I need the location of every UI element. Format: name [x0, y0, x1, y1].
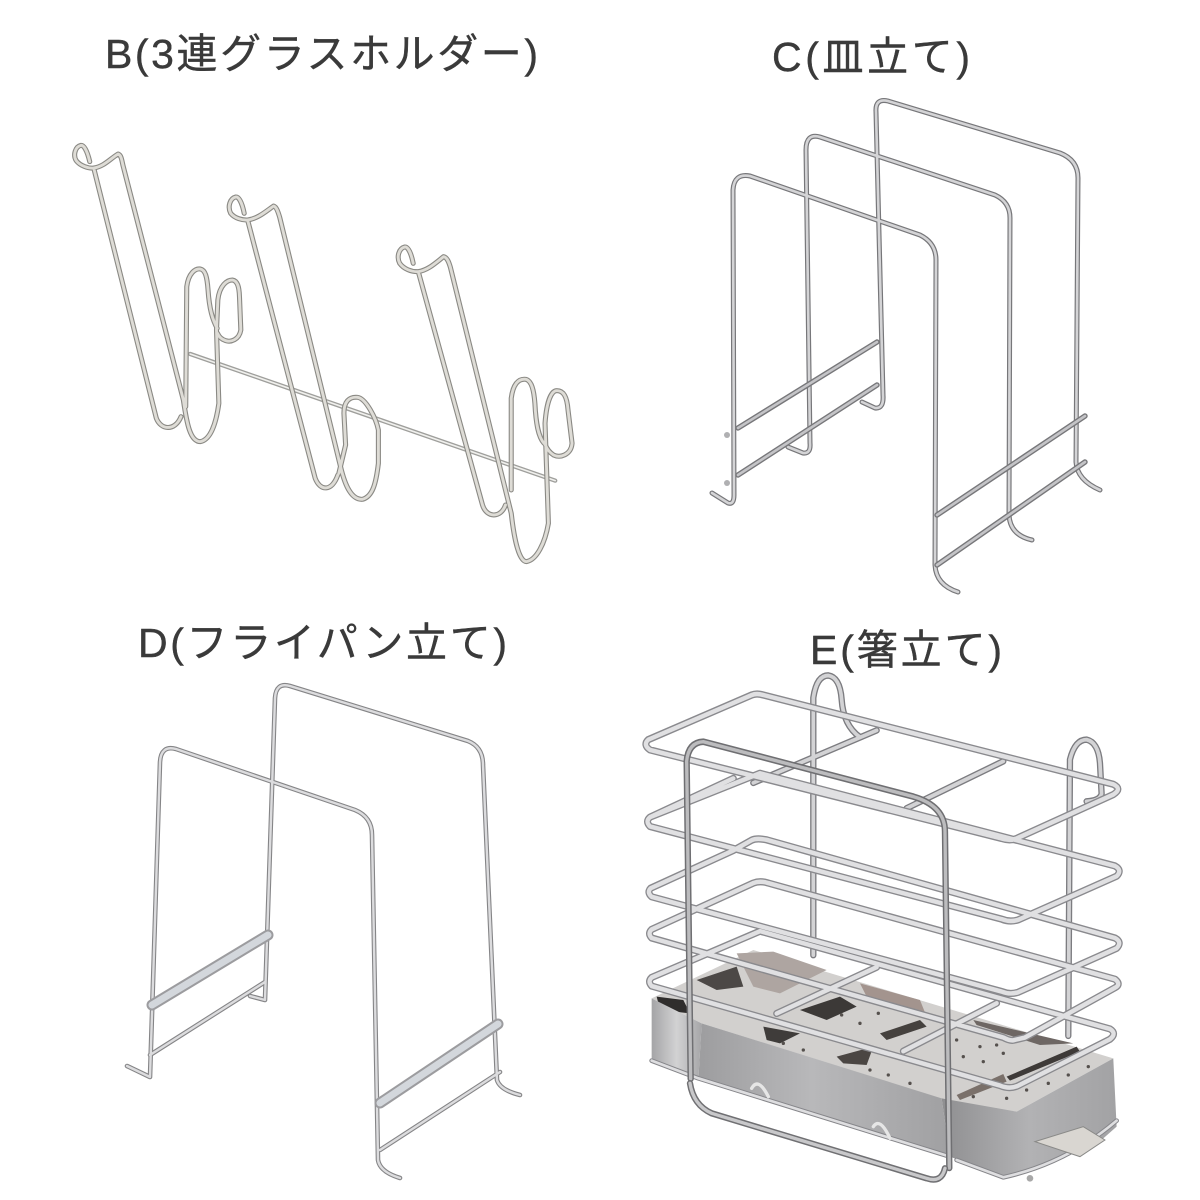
basket back wires — [753, 675, 1102, 1036]
icon: frying pan stand wire rack — [127, 685, 520, 1178]
front frame bottom — [690, 1083, 945, 1180]
icon: triple glass holder wire rack — [75, 145, 572, 562]
panel: B glass holder — [75, 31, 572, 562]
heading: C: C(皿立て) — [772, 34, 970, 80]
heading: E: E(箸立て) — [810, 627, 1002, 673]
basket rings — [646, 694, 1119, 1168]
tray — [652, 950, 1117, 1182]
heading: D: D(フライパン立て) — [138, 620, 507, 666]
panel: D frying pan stand — [127, 620, 520, 1178]
icon: dish stand wire rack — [712, 100, 1100, 592]
icon: chopstick basket with tray — [646, 675, 1119, 1182]
panel: C dish stand — [712, 34, 1100, 592]
heading: B: B(3連グラスホルダー) — [105, 31, 538, 77]
panel: E chopstick stand — [646, 627, 1119, 1182]
